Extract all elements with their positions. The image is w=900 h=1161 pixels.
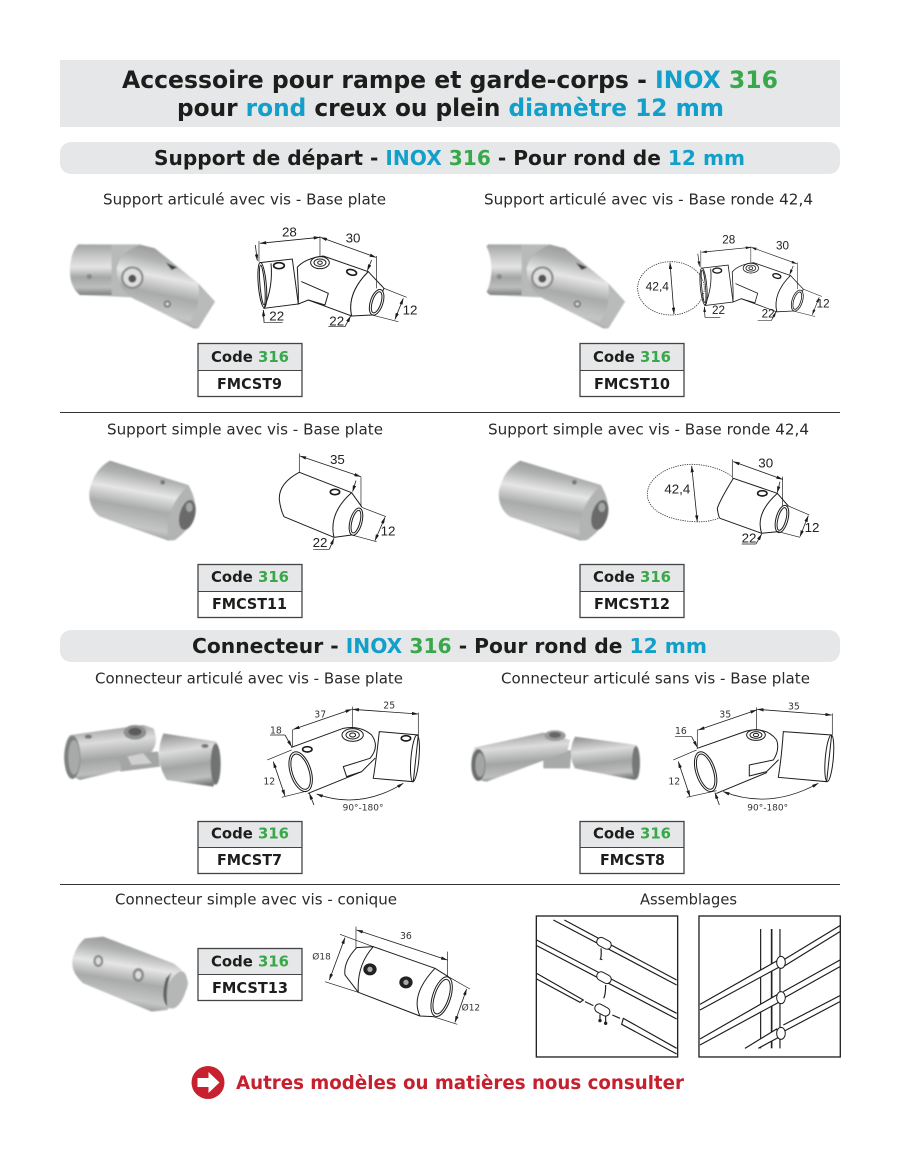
photo: articulated support round base (466, 241, 625, 328)
code box: FMCST10 (594, 375, 670, 393)
subtitle: Support simple avec vis - Base plate (107, 421, 383, 439)
code box (198, 822, 302, 874)
photo: conical connector (72, 937, 191, 1012)
subtitle: Connecteur articulé sans vis - Base plate (501, 670, 810, 688)
heading: connecteur: Connecteur - INOX 316 - Pour rond de 12 mm (192, 634, 707, 658)
code box: Code 316 (211, 348, 289, 366)
heading: support de départ (60, 142, 840, 174)
title (60, 60, 840, 127)
technical drawing (263, 700, 421, 814)
heading: support de départ: Support de départ - INOX 316 - Pour rond de 12 mm (154, 146, 745, 170)
photo: articulated connector (64, 725, 221, 787)
technical drawing: 36 (400, 931, 412, 942)
photo: simple support round base (499, 461, 612, 541)
panel: FMCST13 (72, 891, 480, 1024)
technical drawing: 12 (403, 302, 417, 317)
subtitle: Connecteur simple avec vis - conique (115, 891, 397, 909)
panel: FMCST9 (70, 191, 417, 396)
panel: FMCST10 (466, 191, 830, 396)
technical drawing (668, 701, 835, 814)
technical drawing: 12 (263, 776, 275, 787)
subtitle: Support simple avec vis - Base ronde 42,4 (488, 421, 809, 439)
technical drawing: 12 (381, 524, 395, 539)
title: pour rond creux ou plein diamètre 12 mm (177, 94, 724, 122)
technical drawing: 35 (788, 701, 800, 712)
title: Accessoire pour rampe et garde-corps - INOX 316 (122, 66, 778, 94)
technical drawing: 12 (805, 520, 819, 535)
code box (580, 822, 684, 874)
technical drawing (638, 233, 830, 321)
technical drawing: 35 (330, 452, 345, 467)
panel: FMCST12 (488, 421, 819, 618)
code box: Code 316 (593, 568, 671, 586)
subtitle: Connecteur articulé avec vis - Base plate (95, 670, 403, 688)
code box: Code 316 (211, 825, 289, 843)
technical drawing: 16 (675, 726, 687, 737)
photo: simple support (89, 461, 199, 541)
diagram: vertical posts assembly (699, 916, 840, 1057)
code box: FMCST11 (212, 595, 287, 613)
technical drawing: 22 (762, 308, 775, 321)
code box (580, 564, 684, 618)
technical drawing: 30 (758, 455, 773, 470)
heading: connecteur (60, 630, 840, 662)
code box: FMCST8 (600, 851, 665, 869)
code box (198, 344, 302, 396)
photo: articulated support (70, 244, 215, 328)
technical drawing: 28 (282, 225, 297, 240)
code box: Code 316 (211, 953, 289, 971)
code box: FMCST12 (594, 595, 670, 613)
technical drawing: 12 (668, 777, 680, 788)
panel: FMCST8 (471, 670, 835, 874)
technical drawing: 35 (719, 709, 731, 720)
technical drawing (312, 927, 480, 1024)
technical drawing: 30 (346, 231, 360, 246)
code box: FMCST7 (217, 851, 282, 869)
code box (580, 344, 684, 396)
code box (198, 948, 302, 1000)
code box: Code 316 (593, 825, 671, 843)
technical drawing: Ø18 (312, 952, 331, 963)
code box: Code 316 (211, 568, 289, 586)
panel: FMCST11 (89, 421, 395, 618)
technical drawing: 22 (712, 304, 725, 317)
panel: FMCST7 (64, 670, 421, 874)
icon: red arrow (192, 1066, 224, 1099)
technical drawing: Ø12 (462, 1003, 480, 1014)
technical drawing: 42,4 (664, 482, 691, 497)
technical drawing: 42,4 (646, 280, 669, 294)
heading: assemblages: Assemblages (640, 891, 737, 909)
photo: articulated connector without screw (471, 730, 640, 782)
callout: autres modèles: Autres modèles ou matières nous consulter (236, 1072, 685, 1094)
diagram: inclined rods assembly (536, 916, 678, 1057)
technical drawing: 30 (776, 239, 789, 252)
technical drawing: 22 (313, 535, 327, 550)
code box: FMCST9 (217, 375, 282, 393)
subtitle: Support articulé avec vis - Base ronde 42,4 (484, 191, 813, 209)
technical drawing: 28 (722, 233, 735, 246)
technical drawing: 37 (314, 710, 326, 721)
technical drawing: 22 (742, 531, 756, 546)
technical drawing: 18 (270, 725, 282, 736)
technical drawing: 25 (383, 700, 395, 711)
technical drawing (647, 455, 819, 546)
technical drawing: 90°-180° (747, 804, 788, 814)
technical drawing: 90°-180° (343, 804, 383, 814)
technical drawing: 22 (269, 309, 284, 324)
code box: FMCST13 (212, 979, 288, 997)
panel: assemblages (536, 891, 840, 1057)
code box (198, 564, 302, 618)
technical drawing (255, 225, 417, 328)
subtitle: Support articulé avec vis - Base plate (103, 191, 386, 209)
callout: autres modèles (192, 1066, 685, 1099)
code box: Code 316 (593, 348, 671, 366)
technical drawing (279, 452, 395, 550)
technical drawing: 12 (817, 298, 830, 311)
technical drawing: 22 (329, 313, 344, 328)
